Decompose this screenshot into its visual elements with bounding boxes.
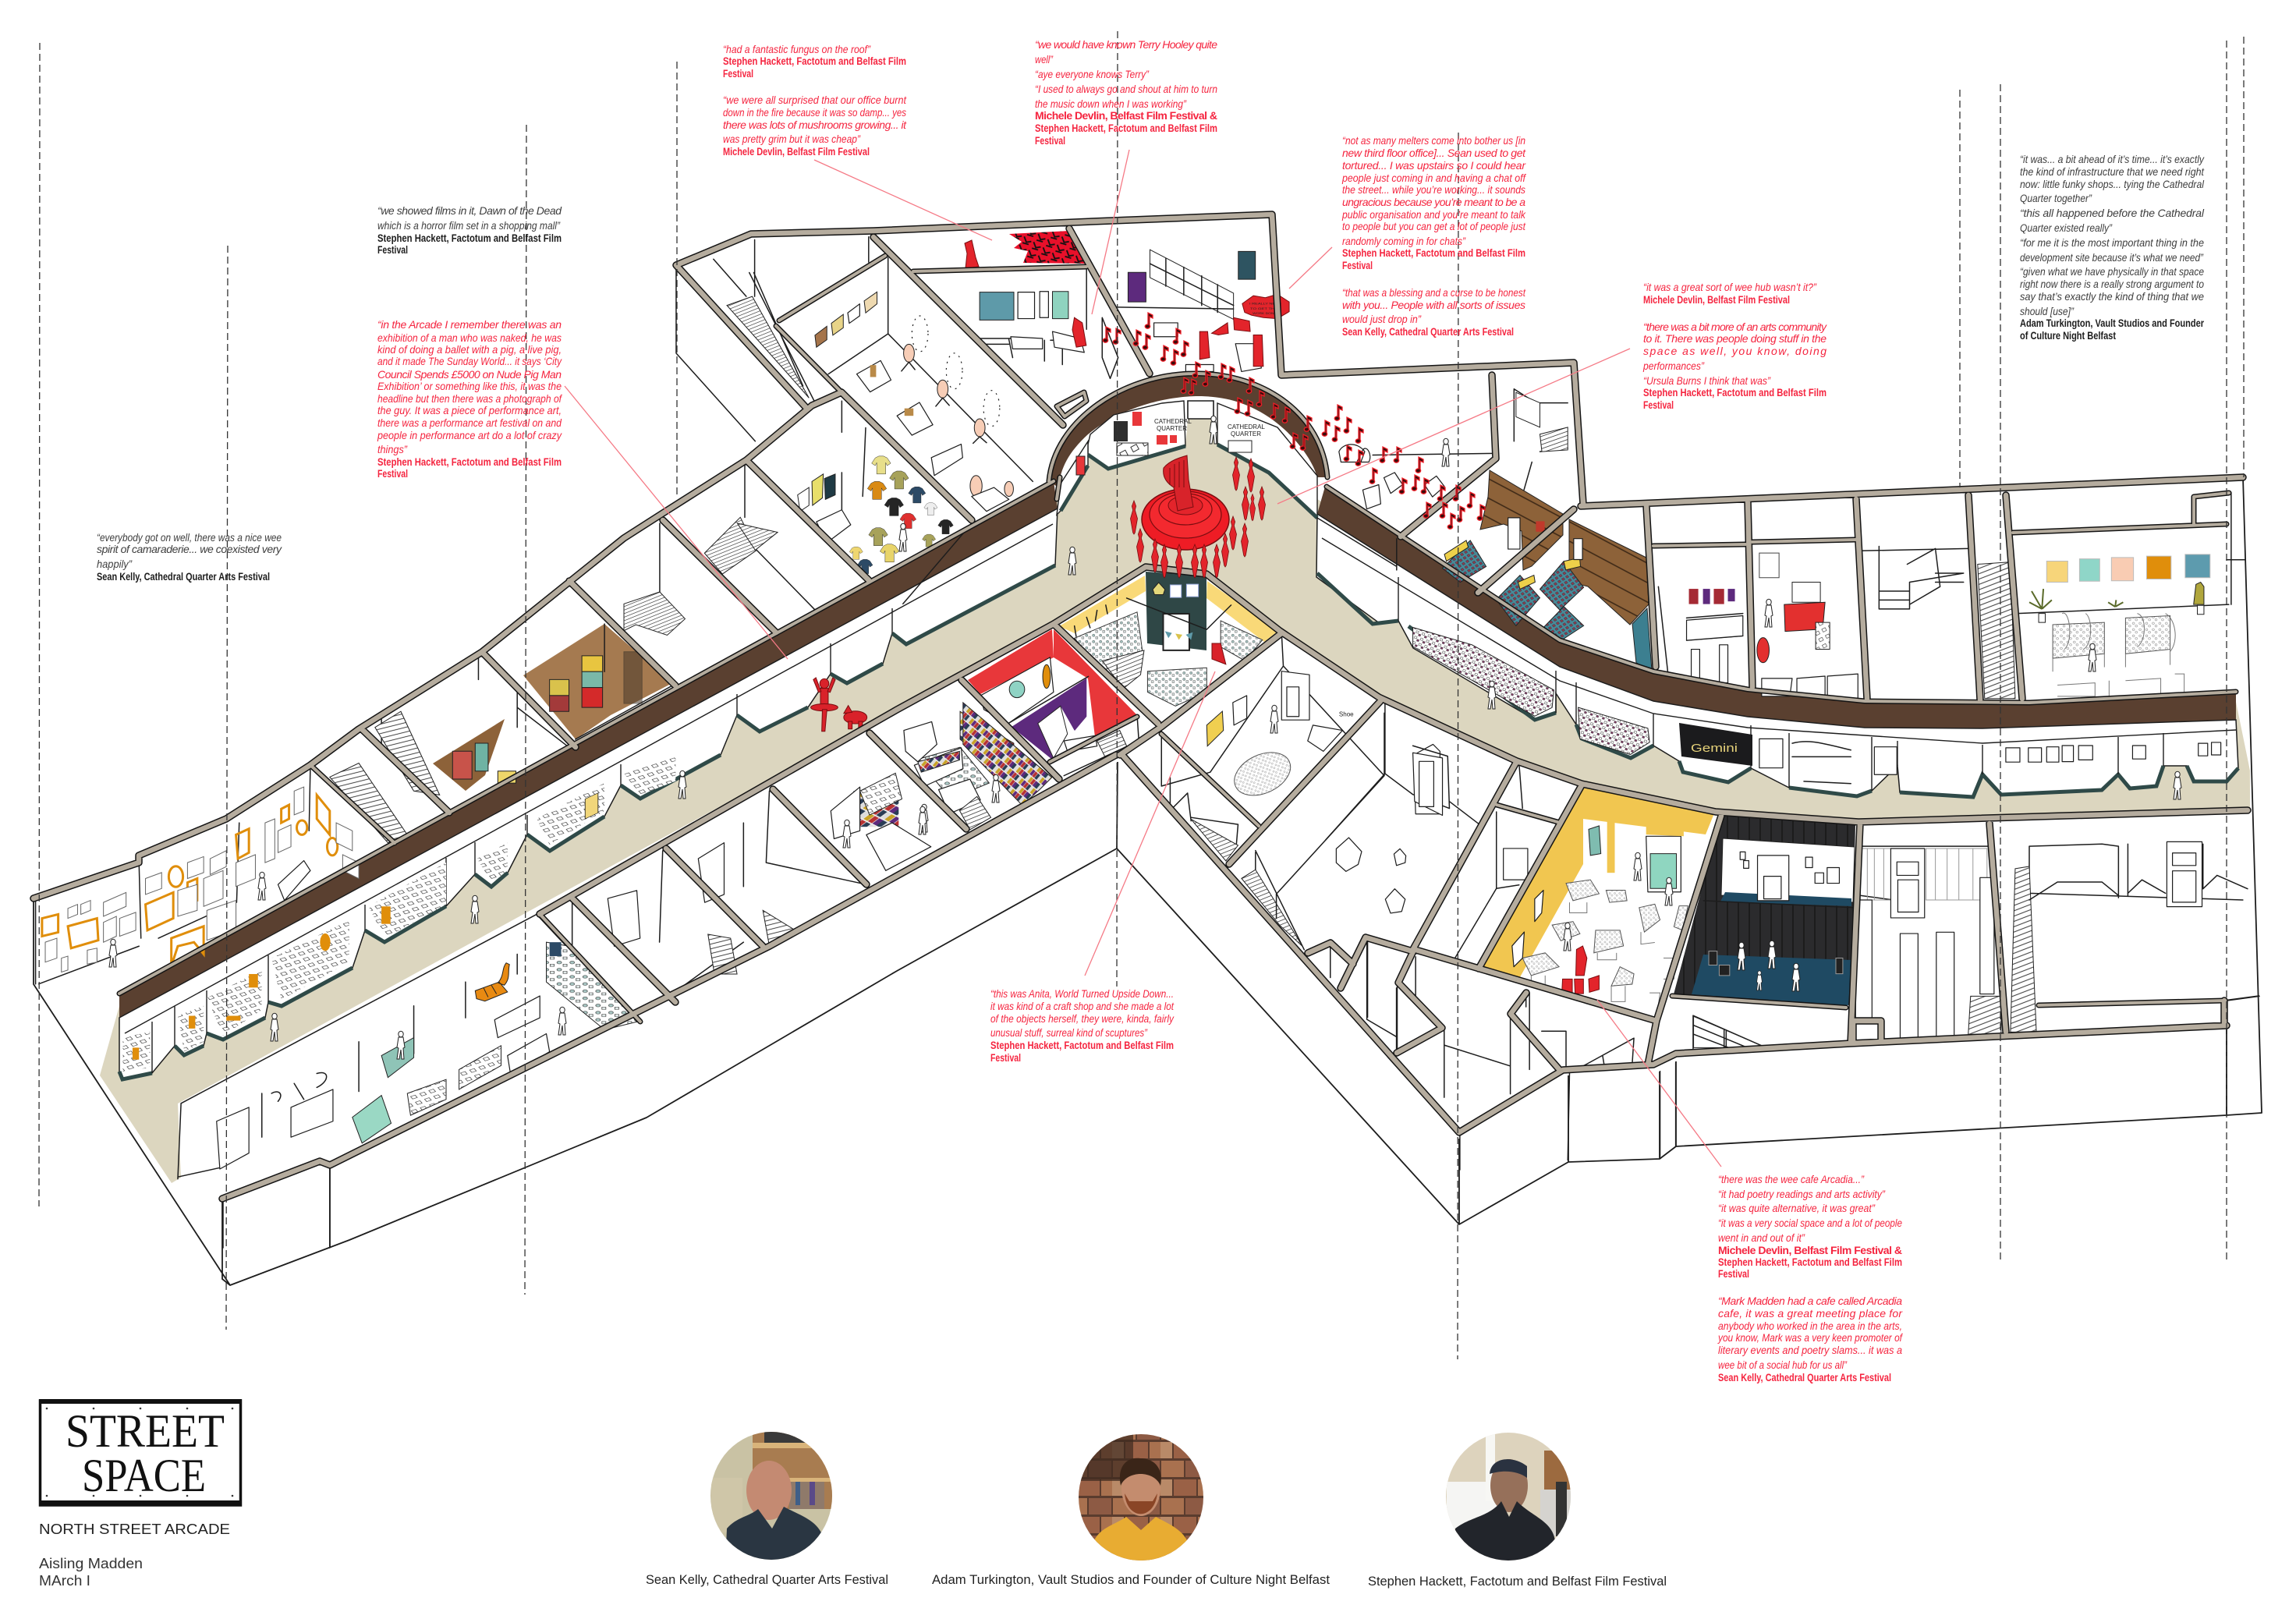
quote: Anita craft shop: Festival	[990, 1051, 1021, 1064]
quote: cafe Arcadia: wee bit of a social hub for us all”	[1718, 1359, 1848, 1371]
portrait captions	[646, 1572, 1667, 1589]
quote: fungus and fire: was pretty grim but it was cheap”	[723, 133, 861, 145]
Gemini shop sign	[1679, 723, 1752, 766]
brown room goods	[452, 652, 642, 783]
shoppers and people	[109, 416, 2181, 1059]
t-shirt shop	[798, 456, 953, 574]
stairs right	[1694, 562, 2036, 1047]
quote: Terry Hooley: Stephen Hackett, Factotum and Belfast Film	[1035, 122, 1217, 134]
quote: pig ballet: the guy. It was a piece of performance art,	[377, 404, 562, 416]
quote: Dawn of the Dead: which is a horror film set in a shopping mall”	[377, 219, 561, 232]
quote: Anita craft shop: unusual stuff, surreal kind of scuptures”	[990, 1026, 1148, 1039]
quote: melters: would just drop in”	[1342, 313, 1422, 325]
title sign: Street Space: SPACE	[82, 1450, 206, 1501]
quote: camaraderie: happily”	[97, 558, 133, 570]
top block offices: TO GET THIS	[1250, 307, 1279, 310]
portrait: Stephen Hackett	[1446, 1433, 1571, 1561]
quote: pig ballet: Exhibition’ or something like this, it was the	[377, 380, 562, 392]
portrait captions: Stephen Hackett, Factotum and Belfast Film Festival	[1368, 1574, 1667, 1589]
quote: cafe Arcadia: Michele Devlin, Belfast Film Festival &	[1718, 1244, 1902, 1256]
stairs upper block	[624, 273, 815, 635]
quote: fungus and fire: there was lots of mushrooms growing... it	[723, 119, 907, 131]
red figures and speech bubbles	[1072, 294, 1289, 367]
harp fountain with audience	[1131, 455, 1265, 578]
left wing stairs	[330, 711, 795, 974]
quote: ahead of its time: Adam Turkington, Vault Studios and Founder	[2020, 317, 2204, 329]
quote: pig ballet: headline but then there was a photograph of	[377, 392, 563, 405]
quote: Dawn of the Dead: “we showed films in it, Dawn of the Dead	[377, 204, 562, 217]
quote: cafe Arcadia: went in and out of it”	[1718, 1231, 1805, 1244]
top block offices	[975, 250, 1289, 416]
quote: pig ballet: and it made The Sunday World... it says ‘City	[377, 355, 562, 367]
quote: cafe Arcadia: “it had poetry readings and arts activity”	[1718, 1188, 1886, 1200]
quote: melters	[1341, 134, 1527, 338]
quote: Terry Hooley: the music down when I was working”	[1035, 97, 1187, 110]
quote: Anita craft shop	[990, 987, 1175, 1064]
quote: ahead of its time	[2020, 153, 2205, 342]
quote: ahead of its time: Quarter existed really”	[2020, 221, 2113, 234]
left wing rooms and galleries	[36, 624, 1014, 1248]
arcade floor	[100, 419, 2250, 1183]
quote: Anita craft shop: Stephen Hackett, Factotum and Belfast Film	[990, 1039, 1174, 1051]
portrait: Sean Kelly	[710, 1432, 832, 1560]
band on stage	[1738, 941, 1800, 991]
quote: melters: randomly coming in for chats”	[1342, 235, 1466, 247]
brown band	[119, 374, 2236, 1018]
arch interior shops: CATHEDRAL	[1228, 423, 1265, 430]
cafe tables and chairs	[1512, 816, 1688, 1017]
quote: pig ballet: kind of doing a ballet with a pig, a live pig,	[377, 343, 562, 356]
hair salon mirrors and chairs	[815, 292, 1013, 512]
quote: camaraderie	[97, 531, 282, 583]
picture frames wall	[42, 787, 359, 972]
quote: melters: Sean Kelly, Cathedral Quarter Arts Festival	[1342, 325, 1514, 338]
quote: cafe Arcadia: literary events and poetry slams... it was a	[1718, 1344, 1902, 1356]
quote: cafe Arcadia: “it was a very social space and a lot of people	[1718, 1217, 1902, 1229]
author and course: MArch I	[39, 1573, 90, 1589]
central rooms	[904, 583, 1440, 1050]
quote: wee hub: Michele Devlin, Belfast Film Festival	[1643, 293, 1790, 306]
quote: fungus and fire: Michele Devlin, Belfast Film Festival	[723, 145, 870, 158]
quote: melters: new third floor office]... Sean used to get	[1342, 147, 1526, 159]
quote: melters: “not as many melters come into bother us [in	[1342, 134, 1525, 147]
quote: Anita craft shop: of the objects herself, they were, kinda, fairly	[990, 1012, 1175, 1025]
quote: ahead of its time: “this all happened before the Cathedral	[2020, 207, 2205, 219]
quote: cafe Arcadia: cafe, it was a great meeting place for	[1718, 1307, 1903, 1320]
book shop	[904, 703, 1052, 830]
quote: Terry Hooley: “aye everyone knows Terry”	[1035, 68, 1150, 80]
quote: wee hub: space as well, you know, doing	[1643, 345, 1827, 357]
quote: melters: Festival	[1342, 259, 1373, 271]
salon counter and red till	[1687, 553, 1858, 699]
quote: pig ballet	[377, 318, 563, 480]
quote: ahead of its time: Quarter together”	[2020, 192, 2092, 204]
quote: melters: the street... while you’re working... it sounds	[1342, 183, 1525, 196]
quote: cafe Arcadia: you know, Mark was a very keen promoter of	[1717, 1331, 1904, 1344]
quote: pig ballet: Council Spends £5000 on Nude Pig Man	[377, 368, 562, 381]
quote: Terry Hooley	[1035, 38, 1217, 147]
top block offices: I REALLY NEED	[1249, 303, 1281, 306]
red fungus on roof	[1009, 231, 1086, 264]
quote: melters: ungracious because you’re meant to be a	[1342, 196, 1525, 208]
quote: pig ballet: exhibition of a man who was naked, he was	[377, 331, 562, 344]
quote: melters: public organisation and you’re meant to talk	[1341, 208, 1526, 221]
quote: melters: tortured... I was upstairs so I could hear	[1342, 159, 1526, 172]
quote: camaraderie: spirit of camaraderie... we coexisted very	[97, 543, 282, 555]
quote: wee hub	[1642, 281, 1827, 411]
quote: wee hub: “there was a bit more of an arts community	[1643, 321, 1827, 333]
quote: wee hub: “it was a great sort of wee hub wasn’t it?”	[1643, 281, 1817, 293]
quote: fungus and fire: Festival	[723, 67, 753, 80]
quote: ahead of its time: the kind of infrastructure that we need right	[2020, 165, 2205, 178]
quote: Anita craft shop: “this was Anita, World Turned Upside Down...	[990, 987, 1174, 1000]
quote: wee hub: to it. There was people doing stuff in the	[1643, 332, 1827, 345]
quote: pig ballet: there was a performance art festival on and	[377, 416, 562, 429]
quote: Terry Hooley: well”	[1035, 53, 1054, 66]
title sign: Street Space: STREET	[66, 1405, 225, 1457]
Gemini shop sign: Gemini	[1691, 742, 1738, 755]
author and course	[39, 1556, 143, 1589]
quote: Anita craft shop: it was kind of a craft shop and she made a lot	[990, 1000, 1175, 1012]
subtitle: NORTH STREET ARCADE	[39, 1522, 230, 1537]
quote: Terry Hooley: “we would have known Terry Hooley quite	[1035, 38, 1217, 51]
quote: ahead of its time: of Culture Night Belfast	[2020, 329, 2116, 342]
quote: pig ballet: Festival	[377, 467, 408, 480]
quote: melters: “that was a blessing and a curse to be honest	[1342, 286, 1526, 299]
quote: fungus and fire	[723, 43, 907, 158]
coloured rooms	[433, 572, 1855, 1005]
quote: wee hub: performances”	[1642, 360, 1705, 372]
author and course: Aisling Madden	[39, 1556, 143, 1571]
quote: camaraderie: Sean Kelly, Cathedral Quarter Arts Festival	[97, 570, 270, 583]
table room: Shoe	[1339, 711, 1354, 718]
music notes drifting from harp	[1103, 313, 1485, 529]
portrait: Adam Turkington	[1079, 1434, 1203, 1561]
quote: fungus and fire: Stephen Hackett, Factotum and Belfast Film	[723, 55, 906, 67]
room outline sketch lines	[624, 237, 1086, 635]
quote: ahead of its time: say that’s exactly the kind of thing that we	[2020, 290, 2204, 303]
quote: wee hub: “Ursula Burns I think that was”	[1643, 374, 1771, 387]
quote: Terry Hooley: Michele Devlin, Belfast Film Festival &	[1035, 109, 1217, 122]
lower right curtains and doors	[1855, 841, 2248, 1039]
quote: fungus and fire: “we were all surprised that our office burnt	[723, 94, 907, 106]
top block offices: WORK DONE	[1253, 312, 1277, 315]
quote: Terry Hooley: “I used to always go and shout at him to turn	[1035, 83, 1217, 95]
dark room sub elements	[1703, 852, 1855, 976]
quote: fungus and fire: “had a fantastic fungus on the roof”	[723, 43, 871, 55]
quote: camaraderie: “everybody got on well, there was a nice wee	[97, 531, 282, 544]
red chairs and speaker	[1562, 946, 1599, 994]
quote: ahead of its time: right now there is a really strong argument to	[2020, 278, 2204, 290]
quote: melters: Stephen Hackett, Factotum and Belfast Film	[1342, 246, 1525, 259]
right lower rooms	[1326, 704, 1855, 1170]
right wing shopfronts	[1316, 514, 2238, 797]
quote: cafe Arcadia: “it was quite alternative, it was great”	[1718, 1202, 1876, 1214]
arcade axonometric drawing	[34, 214, 2262, 1285]
left wing shopfronts	[119, 508, 1058, 1079]
quote: ahead of its time: development site because it’s what we need”	[2020, 251, 2204, 264]
quote: pig ballet: “in the Arcade I remember there was an	[377, 318, 562, 331]
walls black casing and taupe core	[34, 214, 2248, 1199]
quote: pig ballet: things”	[377, 443, 408, 455]
quote: melters: with you... People with all sorts of issues	[1342, 299, 1525, 311]
portrait captions: Sean Kelly, Cathedral Quarter Arts Festival	[646, 1572, 888, 1587]
green wall decorated room	[1075, 583, 1263, 706]
table room	[1161, 633, 1440, 1050]
quote: cafe Arcadia: “Mark Madden had a cafe called Arcadia	[1718, 1295, 1902, 1307]
lower shop displays	[217, 711, 1014, 1169]
quote: pig ballet: people in performance art do a lot of crazy	[377, 429, 562, 441]
quote: pig ballet: Stephen Hackett, Factotum and Belfast Film	[377, 455, 562, 468]
quote: cafe Arcadia: “there was the wee cafe Arcadia...”	[1718, 1173, 1865, 1185]
quote: cafe Arcadia: Stephen Hackett, Factotum and Belfast Film	[1718, 1256, 1902, 1268]
quote: Dawn of the Dead	[377, 204, 562, 256]
arch interior shops: CATHEDRAL	[1154, 418, 1192, 425]
quote: ahead of its time: “given what we have physically in that space	[2020, 265, 2204, 278]
quote: cafe Arcadia: Festival	[1718, 1267, 1749, 1280]
quote: wee hub: Stephen Hackett, Factotum and Belfast Film	[1643, 386, 1827, 399]
quote: cafe Arcadia: anybody who worked in the area in the arts,	[1718, 1320, 1902, 1332]
quote: cafe Arcadia	[1717, 1173, 1904, 1383]
dashed vertical section lines	[39, 31, 2244, 1359]
quote: ahead of its time: now: little funky shops... tying the Cathedral	[2020, 178, 2205, 190]
quote: fungus and fire: down in the fire because it was so damp... yes	[723, 106, 906, 119]
quote: Terry Hooley: Festival	[1035, 134, 1065, 147]
quote: cafe Arcadia: Sean Kelly, Cathedral Quarter Arts Festival	[1718, 1371, 1891, 1383]
title sign: Street Space	[39, 1399, 242, 1506]
record shop racks	[1317, 389, 1652, 671]
quote: Dawn of the Dead: Stephen Hackett, Factotum and Belfast Film	[377, 232, 562, 244]
arch interior shops	[1057, 401, 1317, 518]
right wing rooms	[1658, 493, 2259, 1115]
quote: Dawn of the Dead: Festival	[377, 243, 408, 256]
quote: melters: to people but you can get a lot of people just	[1342, 220, 1526, 232]
quote: wee hub: Festival	[1643, 399, 1674, 411]
quote: ahead of its time: “for me it is the most important thing in the	[2020, 236, 2204, 249]
colour swatches	[2046, 554, 2210, 582]
tiger on wall	[475, 963, 509, 1001]
portrait captions: Adam Turkington, Vault Studios and Founder of Culture Night Belfast	[932, 1572, 1330, 1587]
co-work tables and plants	[2029, 582, 2204, 696]
red room sub elements	[980, 657, 1139, 776]
quote: ahead of its time: “it was... a bit ahead of it’s time... it’s exactly	[2020, 153, 2205, 165]
quote: ahead of its time: should [use]”	[2020, 305, 2075, 317]
red quote leader lines	[565, 150, 1721, 1167]
arch interior shops: QUARTER	[1157, 425, 1187, 432]
bottom wedge sketch lines	[34, 477, 2262, 1285]
quote: melters: people just coming in and having a chat off	[1341, 172, 1527, 184]
arch interior shops: QUARTER	[1231, 430, 1261, 438]
performance dancer and pig	[811, 678, 867, 732]
